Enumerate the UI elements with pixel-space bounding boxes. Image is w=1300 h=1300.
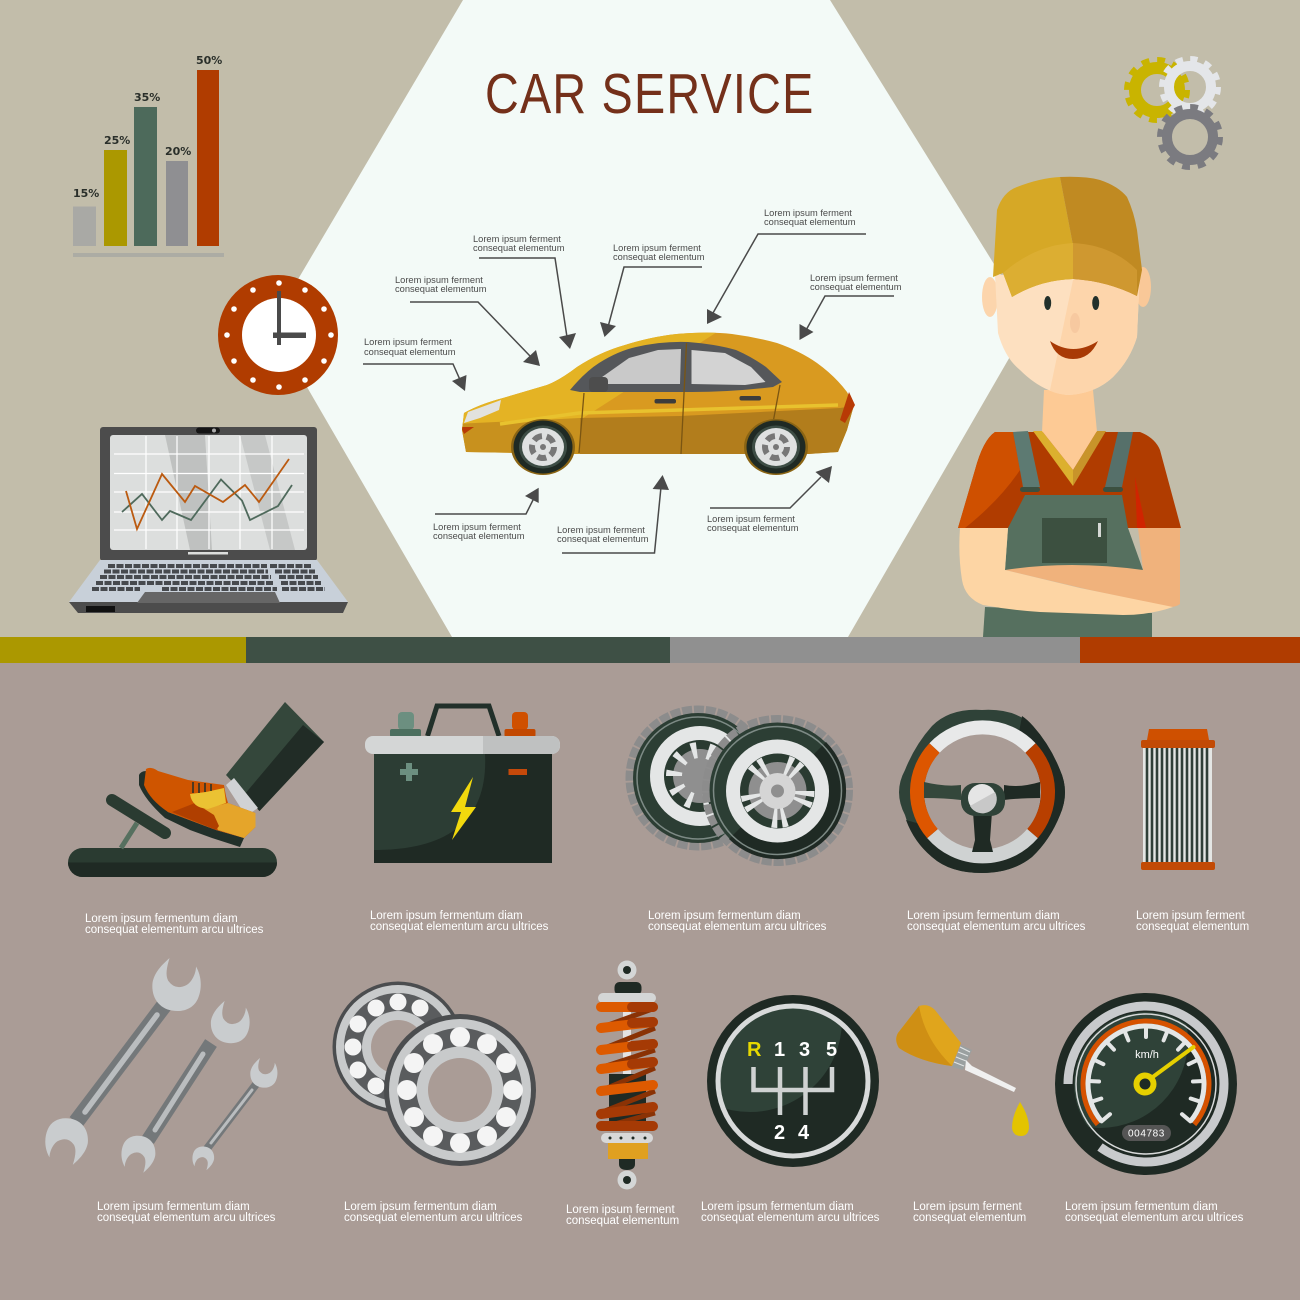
caption row 2: Lorem ipsum fermentum diam	[701, 1201, 854, 1213]
callout 3: consequat elementum	[473, 243, 565, 253]
bar chart	[73, 54, 224, 257]
bottom background	[0, 662, 1300, 1300]
caption row 2	[97, 1201, 1244, 1227]
icon: gear shift dial: R	[747, 1039, 762, 1061]
caption row 1: consequat elementum arcu ultrices	[648, 921, 827, 933]
top background	[0, 0, 1300, 637]
rear tyre	[630, 710, 766, 846]
icon: gear shift dial: 3	[799, 1039, 810, 1061]
icon: speedometer: km/h	[1135, 1049, 1159, 1061]
icon: shock absorber	[598, 960, 656, 1190]
caption row 1: consequat elementum arcu ultrices	[85, 924, 264, 936]
caption row 1: Lorem ipsum fermentum diam	[370, 910, 523, 922]
icon: gear shift dial	[707, 995, 879, 1167]
callout 8: Lorem ipsum ferment	[557, 525, 645, 535]
caption row 2: Lorem ipsum ferment	[913, 1201, 1022, 1213]
car diagram	[363, 208, 902, 553]
callout 2: Lorem ipsum ferment	[395, 275, 483, 285]
head	[982, 267, 1151, 395]
callout 1	[363, 337, 466, 391]
caption row 1: consequat elementum arcu ultrices	[907, 921, 1086, 933]
caption row 1	[85, 910, 1249, 936]
bar chart: 35%	[134, 91, 160, 104]
caption row 2: consequat elementum arcu ultrices	[701, 1212, 880, 1224]
icon: speedometer	[1055, 993, 1237, 1175]
caption row 2: consequat elementum arcu ultrices	[344, 1212, 523, 1224]
caption row 1: Lorem ipsum fermentum diam	[907, 910, 1060, 922]
icon: gear shift dial: 2	[774, 1122, 785, 1144]
title: CAR SERVICE	[485, 63, 814, 126]
callout 9	[707, 466, 832, 533]
rear wheel	[744, 419, 808, 475]
callout 8: consequat elementum	[557, 534, 649, 544]
icon: laptop	[69, 427, 348, 613]
caption row 2: consequat elementum	[913, 1212, 1026, 1224]
icon: ball bearings	[332, 982, 536, 1166]
icon: steering wheel	[899, 710, 1065, 873]
caption row 2: Lorem ipsum fermentum diam	[97, 1201, 250, 1213]
callout 7	[433, 488, 539, 541]
callout 3: Lorem ipsum ferment	[473, 234, 561, 244]
callout 9: Lorem ipsum ferment	[707, 514, 795, 524]
bar chart: 25%	[104, 134, 130, 147]
caption row 2: Lorem ipsum fermentum diam	[1065, 1201, 1218, 1213]
front wheel	[511, 419, 575, 475]
back bearing	[332, 982, 464, 1112]
caption row 2: Lorem ipsum fermentum diam	[344, 1201, 497, 1213]
callout 6: consequat elementum	[810, 282, 902, 292]
car	[455, 325, 860, 475]
callout 2: consequat elementum	[395, 284, 487, 294]
callout 6	[800, 273, 902, 340]
neck and collar	[1033, 390, 1106, 486]
caption row 1: Lorem ipsum ferment	[1136, 910, 1245, 922]
callout 8	[557, 475, 669, 553]
icon: car battery	[365, 706, 560, 863]
mechanic figure	[958, 177, 1181, 637]
caption row 2: Lorem ipsum ferment	[566, 1204, 675, 1216]
icon: gear shift dial: 1	[774, 1039, 785, 1061]
callout 7: consequat elementum	[433, 531, 525, 541]
callout 1: Lorem ipsum ferment	[364, 337, 452, 347]
callout 6: Lorem ipsum ferment	[810, 273, 898, 283]
bar chart: 15%	[73, 187, 99, 200]
icon: wrenches	[42, 956, 280, 1174]
arms	[959, 528, 1180, 615]
shirt	[958, 432, 1181, 528]
caption row 2: consequat elementum	[566, 1215, 679, 1227]
caption row 2: consequat elementum arcu ultrices	[1065, 1212, 1244, 1224]
callout 5	[707, 208, 866, 324]
callout 4: Lorem ipsum ferment	[613, 243, 701, 253]
callout 2	[395, 275, 540, 366]
front bearing	[384, 1014, 536, 1166]
callout 4: consequat elementum	[613, 252, 705, 262]
trousers	[983, 607, 1152, 637]
central hexagon panel	[271, 0, 1030, 637]
icon: gears	[1127, 59, 1220, 167]
front tyre	[706, 719, 849, 862]
icon: gear shift dial: 5	[826, 1039, 837, 1061]
callout 1: consequat elementum	[364, 347, 456, 357]
callout 5: consequat elementum	[764, 217, 856, 227]
callout 9: consequat elementum	[707, 523, 799, 533]
icon: speedometer: 004783	[1128, 1128, 1165, 1140]
icon: air filter	[1141, 729, 1215, 870]
icon: oil dropper	[896, 1005, 1029, 1136]
caption row 1: consequat elementum	[1136, 921, 1249, 933]
bar chart: 20%	[165, 145, 191, 158]
callout 4	[600, 243, 705, 337]
callout 5: Lorem ipsum ferment	[764, 208, 852, 218]
callout 3	[473, 234, 576, 349]
icon: wall clock	[218, 275, 338, 395]
caption row 2: consequat elementum arcu ultrices	[97, 1212, 276, 1224]
icon: gear shift dial: 4	[798, 1122, 810, 1144]
icon: tyres	[630, 710, 849, 862]
bar chart: 50%	[196, 54, 222, 67]
caption row 1: Lorem ipsum fermentum diam	[85, 913, 238, 925]
caption row 1: consequat elementum arcu ultrices	[370, 921, 549, 933]
icon: foot on pedal	[68, 702, 324, 877]
caption row 1: Lorem ipsum fermentum diam	[648, 910, 801, 922]
overalls	[1005, 431, 1143, 570]
colour strip	[0, 637, 1300, 663]
callout 7: Lorem ipsum ferment	[433, 522, 521, 532]
cap	[993, 177, 1142, 297]
